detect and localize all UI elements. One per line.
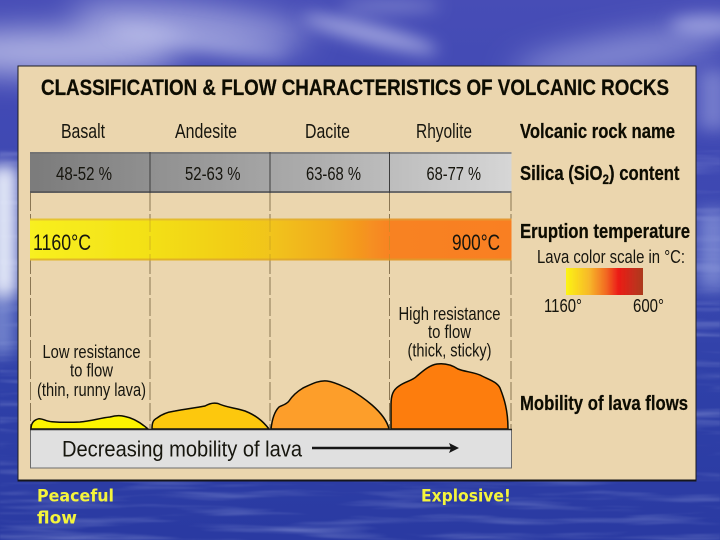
eruption temperature bar — [30, 218, 512, 261]
rock names row: Rhyolite — [416, 121, 472, 143]
annotation: low resistance: Low resistance — [42, 342, 140, 362]
caption: peaceful flow: Peaceful — [37, 486, 114, 506]
panel: classification chart — [18, 66, 696, 482]
legend: lava color scale: 600° — [633, 296, 664, 316]
label: volcanic rock name: Volcanic rock name — [520, 121, 675, 143]
rock names row: Basalt — [61, 121, 105, 143]
legend: lava color scale: Lava color scale in °C: — [537, 247, 685, 267]
lava flow shapes — [31, 364, 508, 429]
legend: lava color scale — [537, 247, 685, 316]
label: eruption temperature: Eruption temperature — [520, 221, 690, 243]
annotation: high resistance: (thick, sticky) — [408, 340, 492, 360]
eruption temperature bar: 1160°C — [33, 230, 91, 255]
rock names row: Dacite — [305, 121, 350, 143]
annotation: low resistance: (thin, runny lava) — [37, 380, 146, 400]
eruption temperature bar: 900°C — [452, 230, 500, 255]
label: mobility of lava flows: Mobility of lava flows — [520, 393, 688, 415]
caption: peaceful flow — [37, 486, 114, 528]
silica content bar: 68-77 % — [426, 164, 481, 184]
arrow — [312, 443, 459, 453]
legend: lava color scale: 1160° — [544, 296, 582, 316]
silica content bar: 63-68 % — [306, 164, 361, 184]
silica content bar — [30, 152, 512, 193]
annotation: high resistance — [398, 304, 500, 360]
dashed column guides — [30, 193, 511, 429]
rock names row: Andesite — [175, 121, 237, 143]
caption: explosive: Explosive! — [421, 486, 511, 506]
decreasing mobility bar: Decreasing mobility of lava — [62, 436, 303, 462]
decreasing mobility bar — [30, 430, 512, 468]
lava: rhyolite — [391, 364, 508, 429]
annotation: high resistance: to flow — [428, 322, 472, 342]
caption: peaceful flow: flow — [37, 508, 77, 528]
annotation: low resistance: to flow — [70, 360, 114, 380]
annotation: low resistance — [37, 342, 146, 400]
annotation: high resistance: High resistance — [398, 304, 500, 324]
label: silica content: ) content — [609, 163, 680, 185]
lava: dacite — [271, 381, 389, 429]
label: silica content: 2 — [603, 171, 609, 187]
silica content bar: 52-63 % — [185, 164, 240, 184]
rock names row — [61, 121, 472, 143]
label: silica content: Silica (SiO — [520, 163, 619, 185]
lava: andesite — [152, 403, 269, 429]
lava: basalt — [31, 416, 148, 429]
silica content bar: 48-52 % — [56, 164, 112, 184]
